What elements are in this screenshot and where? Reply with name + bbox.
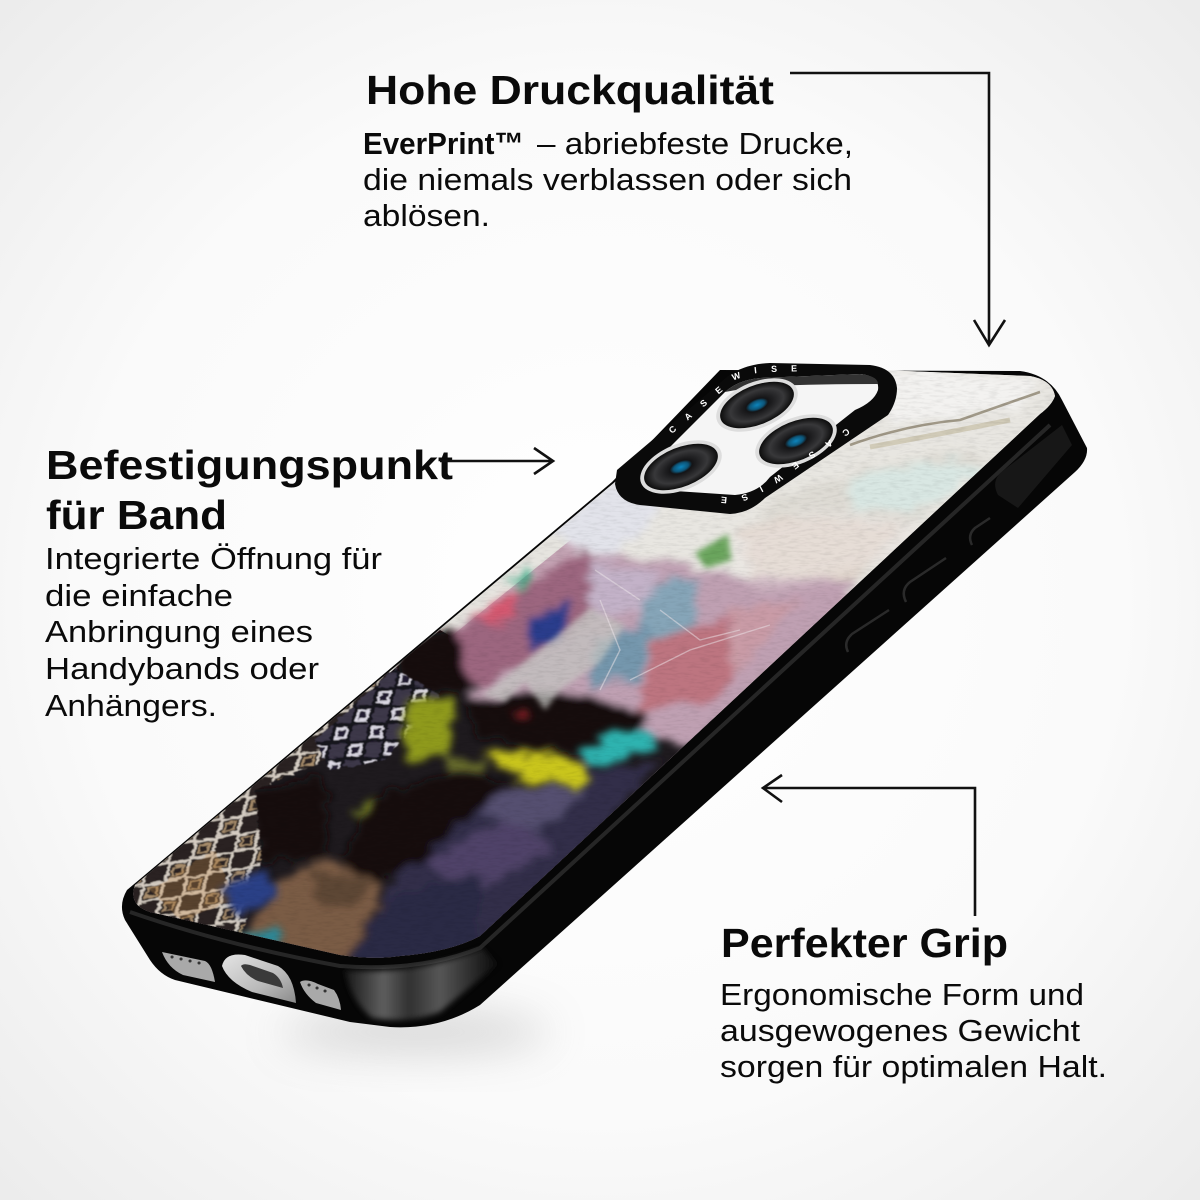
- charging port: [222, 954, 296, 1003]
- body text: – abriebfeste Drucke,: [537, 126, 853, 161]
- art: diamond pattern: [120, 665, 440, 945]
- callout: strap attachment: [45, 442, 453, 723]
- art: crumple lines: [595, 570, 770, 690]
- art: translucent gauze: [482, 608, 625, 710]
- side switch recess: [995, 425, 1072, 508]
- art: marble vein: [850, 392, 1040, 445]
- corner gloss: [345, 948, 498, 1020]
- body text: sorgen für optimalen Halt.: [720, 1049, 1107, 1084]
- lens: right: [748, 404, 844, 478]
- heading: Befestigungspunkt: [46, 442, 453, 488]
- art: grain: [138, 370, 1054, 948]
- art: cyan strokes: [578, 726, 658, 764]
- speaker grille left: [162, 952, 215, 982]
- heading: [46, 442, 453, 538]
- camera inner shadow: [725, 374, 878, 392]
- case body: [122, 370, 1087, 1027]
- speaker dots right: [309, 985, 325, 991]
- body text: ausgewogenes Gewicht: [720, 1013, 1080, 1048]
- body text: [363, 126, 853, 233]
- phone drop shadow: [280, 1012, 550, 1052]
- art: graffiti: [430, 545, 590, 690]
- body text: ablösen.: [363, 198, 490, 233]
- art: dark blobs: [395, 630, 470, 695]
- speaker grille right: [300, 980, 341, 1010]
- art: pink and blue canvas: [470, 553, 860, 745]
- body text: die einfache: [45, 578, 233, 613]
- camera glass: [642, 374, 878, 495]
- art: brown layer: [235, 860, 385, 965]
- body text: EverPrint™: [363, 126, 524, 161]
- art: yellow strokes: [403, 695, 455, 760]
- art: painted colour fields: [235, 365, 1070, 975]
- artwork: [133, 370, 1055, 958]
- lens: top: [709, 368, 805, 442]
- art: bright accents: [222, 695, 658, 955]
- art: lace area: [550, 475, 660, 565]
- callout: perfect grip: [720, 920, 1107, 1084]
- lens: left: [633, 430, 729, 504]
- body text: Handybands oder: [45, 651, 319, 686]
- camera ring: [615, 363, 897, 514]
- art: purple lower field: [340, 760, 660, 975]
- body text: Anbringung eines: [45, 614, 313, 649]
- callout: print quality: [363, 67, 853, 233]
- charging slot: [241, 964, 283, 988]
- art: green patch: [695, 534, 732, 568]
- camera ring lettering: [669, 365, 850, 504]
- heading: Perfekter Grip: [721, 920, 1008, 966]
- art: red fleck: [508, 708, 526, 722]
- phone case with artwork: [122, 363, 1088, 1028]
- art: teal corner: [238, 922, 287, 942]
- camera bump: [615, 363, 897, 514]
- body text: Ergonomische Form und: [720, 977, 1084, 1012]
- body text: Integrierte Öffnung für: [45, 541, 382, 576]
- arrow: print quality: [790, 73, 1005, 345]
- body text: Anhängers.: [45, 688, 217, 723]
- arrow: perfect grip: [763, 775, 975, 916]
- camera ring lettering: CASEWISE: [669, 365, 797, 433]
- side buttons: [846, 518, 990, 652]
- arrow: strap attachment: [440, 448, 553, 474]
- speaker dots left: [172, 957, 199, 963]
- body text: [45, 541, 382, 723]
- body text: die niemals verblassen oder sich: [363, 162, 852, 197]
- art: pale marble: [590, 365, 1070, 600]
- case rim highlight: [130, 425, 1050, 967]
- heading: für Band: [46, 492, 227, 538]
- art: blue stroke: [222, 868, 280, 918]
- body text: [720, 977, 1107, 1084]
- camera ring lettering: CASEWISE: [721, 429, 850, 504]
- heading: Hohe Druckqualität: [366, 67, 774, 113]
- bottom face ports: [162, 952, 341, 1010]
- art: base fields: [133, 540, 856, 958]
- art: pale veil: [734, 513, 915, 588]
